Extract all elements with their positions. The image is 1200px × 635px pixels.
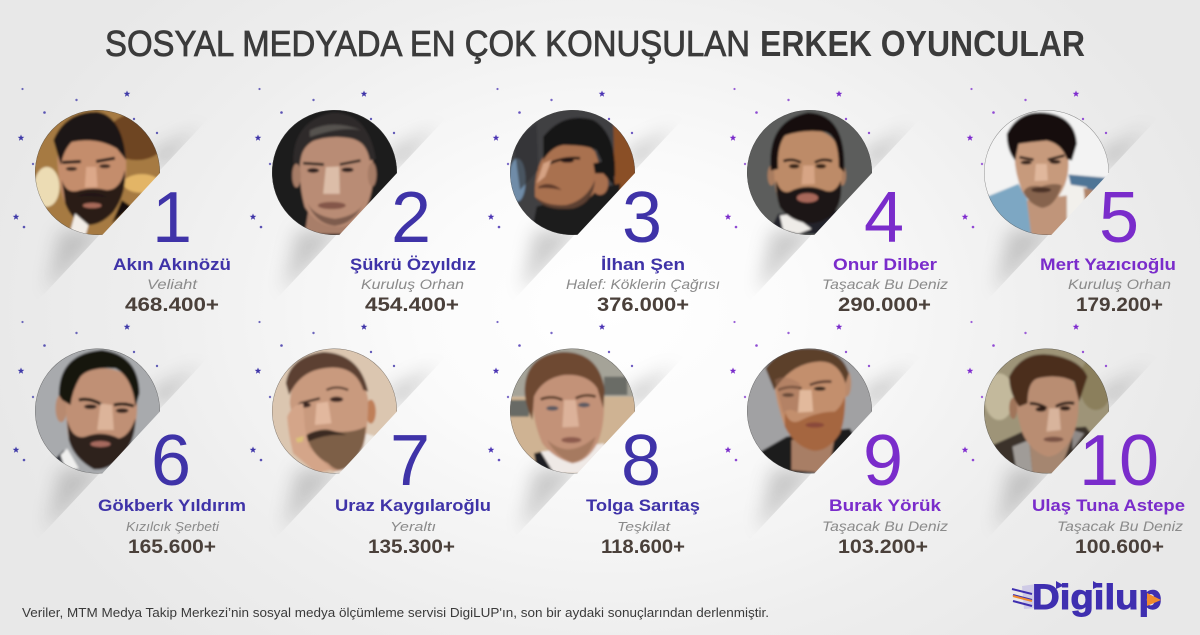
number 10: 10 bbox=[1079, 421, 1159, 501]
value: 165.600+ bbox=[128, 537, 216, 558]
portrait 8 bbox=[510, 348, 635, 474]
series: Veliaht bbox=[147, 276, 198, 292]
name: Ulaş Tuna Astepe bbox=[1032, 496, 1185, 515]
series: Yeraltı bbox=[390, 519, 436, 534]
value: 376.000+ bbox=[597, 295, 689, 316]
name: Onur Dilber bbox=[833, 255, 937, 274]
name: Uraz Kaygılaroğlu bbox=[335, 496, 491, 515]
series: Taşacak Bu Deniz bbox=[822, 276, 948, 292]
name: Burak Yörük bbox=[829, 496, 942, 515]
portrait 7 bbox=[272, 348, 397, 474]
value: 454.400+ bbox=[365, 295, 459, 316]
card 1: Akın Akınözü bbox=[13, 88, 231, 316]
card 4: Onur Dilber bbox=[725, 88, 948, 316]
portrait 1 bbox=[35, 110, 160, 235]
series: Kuruluş Orhan bbox=[1068, 276, 1171, 292]
card 2: Şükrü Özyıldız bbox=[250, 88, 476, 316]
name: Akın Akınözü bbox=[113, 255, 231, 274]
portrait 5 bbox=[984, 110, 1109, 235]
series: Teşkilat bbox=[617, 519, 672, 534]
number 2: 2 bbox=[391, 178, 431, 258]
series: Taşacak Bu Deniz bbox=[822, 518, 948, 534]
card 9: Burak Yörük bbox=[725, 321, 948, 558]
portrait 4 bbox=[747, 110, 872, 235]
number 4: 4 bbox=[864, 178, 904, 258]
card 3: İlhan Şen bbox=[488, 88, 720, 316]
portrait 2 bbox=[272, 110, 397, 235]
number 6: 6 bbox=[151, 421, 191, 501]
title: SOSYAL MEDYADA EN ÇOK KONUŞULAN bbox=[105, 23, 750, 64]
portrait 10 bbox=[984, 348, 1109, 474]
value: 290.000+ bbox=[838, 295, 931, 316]
name: Şükrü Özyıldız bbox=[350, 255, 476, 274]
name: Mert Yazıcıoğlu bbox=[1040, 255, 1176, 274]
number 8: 8 bbox=[621, 421, 661, 501]
number 9: 9 bbox=[863, 421, 903, 501]
portrait 6 bbox=[35, 348, 160, 474]
value: 135.300+ bbox=[368, 537, 455, 558]
number 3: 3 bbox=[622, 178, 662, 258]
title: ERKEK OYUNCULAR bbox=[760, 23, 1085, 64]
card 6: Gökberk Yıldırım bbox=[13, 321, 246, 558]
value: 468.400+ bbox=[125, 295, 219, 316]
footer note: Veriler, MTM Medya Takip Merkezi’nin sosyal medya ölçümleme servisi DigiLUP'ın, son bir aydaki sonuçlarından derlenmiştir. bbox=[22, 605, 769, 620]
series: Taşacak Bu Deniz bbox=[1057, 518, 1183, 534]
card 5: Mert Yazıcıoğlu bbox=[962, 88, 1176, 316]
number 5: 5 bbox=[1099, 178, 1139, 258]
value: 179.200+ bbox=[1076, 295, 1163, 316]
number 7: 7 bbox=[390, 421, 430, 501]
name: Tolga Sarıtaş bbox=[586, 496, 700, 515]
series: Kuruluş Orhan bbox=[361, 276, 464, 292]
name: İlhan Şen bbox=[601, 255, 685, 274]
card 7: Uraz Kaygılaroğlu bbox=[250, 321, 491, 558]
logo: Digilup: Digilup bbox=[1032, 578, 1162, 617]
name: Gökberk Yıldırım bbox=[98, 496, 246, 515]
portrait 9 bbox=[747, 348, 872, 474]
series: Halef: Köklerin Çağrısı bbox=[566, 276, 720, 292]
number 1: 1 bbox=[152, 178, 192, 258]
value: 100.600+ bbox=[1075, 537, 1164, 558]
card 8: Tolga Sarıtaş bbox=[488, 321, 700, 558]
series: Kızılcık Şerbeti bbox=[126, 519, 220, 534]
card 10: Ulaş Tuna Astepe bbox=[962, 321, 1185, 558]
portrait 3 bbox=[510, 110, 635, 235]
value: 118.600+ bbox=[601, 537, 685, 558]
value: 103.200+ bbox=[838, 537, 928, 558]
